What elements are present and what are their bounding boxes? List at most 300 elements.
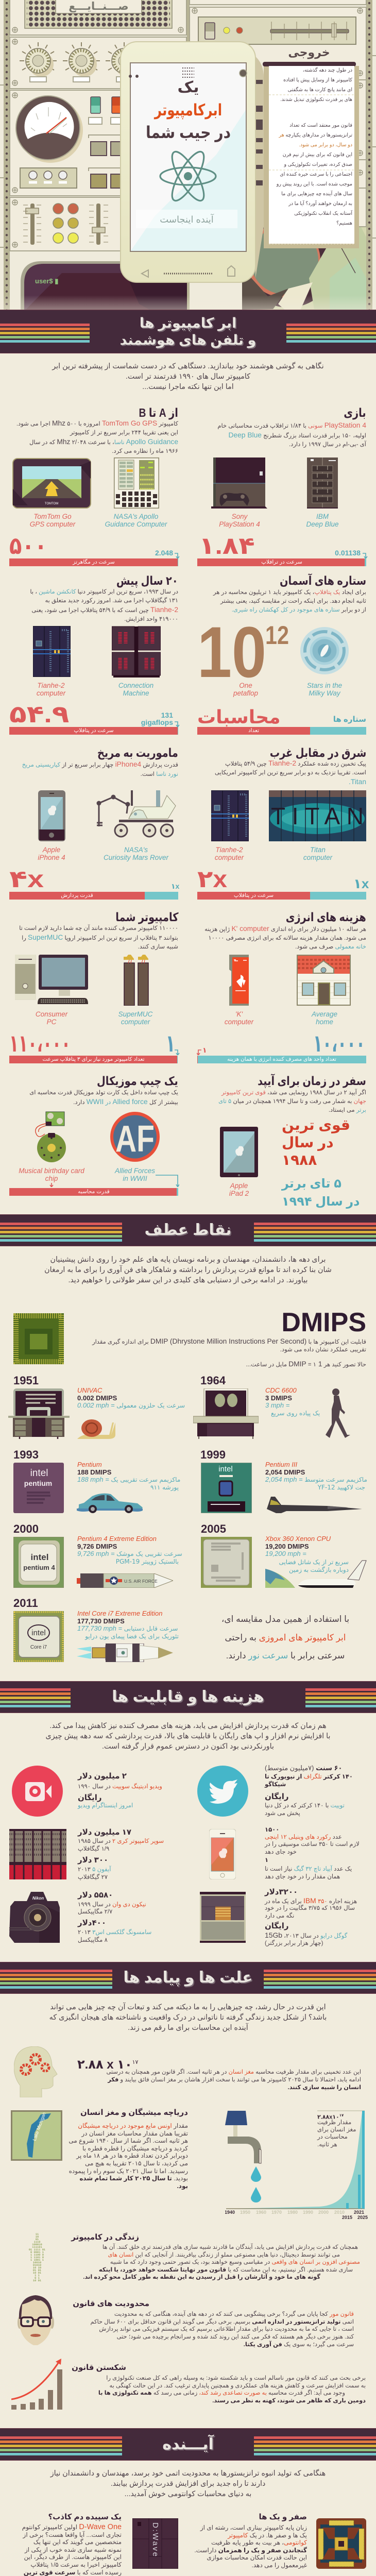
- text: life: همچنان که قدرت پردازش افزایش می یابد، آیندگان ما قادرند شبیه سازی های قدرتمند تری خلق کنند. آن ها: [102, 2244, 358, 2250]
- icon: Cray 2: [9, 1829, 66, 1879]
- banner: the future: آیـــنده: [162, 2436, 214, 2453]
- text: shuttle: دوباره بازگشت به زمین: [289, 1566, 349, 1573]
- text: imagine: حالا تصور کنید هر 1 DMIP = ۱ مایل در ساعت...: [246, 1360, 366, 1368]
- heading: east vs west: شرق در مقابل غرب: [269, 746, 366, 759]
- year 1951: 1951: [13, 1374, 39, 1387]
- heading: lake: دریاچه میشیگان و مغز انسان: [80, 2108, 188, 2117]
- text: vinyl: [265, 1826, 368, 1880]
- text: Xbox: Xbox 360 Xenon CPU 19,200 mph =: [265, 1535, 331, 1557]
- text: zeros and ones: زبان پایه کامپیوتر بیناری است، رشته ای از: [200, 2524, 307, 2531]
- icon: binary human figure: 1 1001 1: [30, 2259, 44, 2262]
- icon: binary human figure: 10 01: [33, 2272, 41, 2275]
- text: A to B: [16, 419, 178, 454]
- text: gaming: [217, 421, 367, 448]
- intro text: باشد؟ از شکل جدید زندگی گرفته تا ناتوانی در درک واقعیت و ناشناخته های هیجان انگیزی که: [49, 2013, 327, 2022]
- text: [218, 1089, 366, 1115]
- heading: limits of the law: محدودیت های قانون: [73, 2299, 149, 2308]
- stat: 10,000: ۱۰،۰۰۰: [313, 1030, 365, 1057]
- caption: Curiosity Mars Rover: [104, 854, 168, 861]
- caption: [303, 846, 333, 861]
- arrow: [197, 1049, 202, 1055]
- icon: brain gears head: [14, 2046, 58, 2097]
- title: phone headline: یک: [177, 79, 199, 96]
- panel: speaker grille with label: [10, 0, 186, 35]
- intro text: [0, 1721, 376, 1752]
- stat: 500: ۵۰۰: [9, 532, 47, 559]
- icon: quantum chip: [316, 2518, 366, 2569]
- text: A to B: ۱۹۶۶ ماه را نظاره می کرد.: [112, 448, 178, 454]
- heading: zeros and ones: صفر و یک ها: [259, 2513, 307, 2521]
- text: i7: 177,730 DMIPS: [77, 1617, 125, 1625]
- text block: moore law on paper: آستانه یک انقلاب تکنولوژیکی: [294, 211, 352, 216]
- caption: [99, 1167, 171, 1182]
- icon: binary human figure: 01 01: [33, 2269, 41, 2272]
- text: از دو برابر ستاره های موجود در کل کهکشان راه شیری.: [232, 607, 366, 613]
- icon: snail: [77, 1419, 115, 1439]
- caption: Machine: [123, 689, 149, 697]
- quote: light speed: [201, 1610, 370, 1665]
- axis labels: 2021: [354, 2210, 364, 2215]
- text block: moore law on paper: قانون مور معتقد است که تعداد: [289, 123, 352, 128]
- icon: Instagram video: [12, 1766, 63, 1817]
- axis labels: 1960: [256, 2210, 266, 2215]
- caption: PlayStation 4: [219, 520, 260, 528]
- text: برتر می ایستاد.: [329, 1107, 366, 1113]
- caption: petaflop: [233, 689, 258, 697]
- text: lake: تقریبا همان مقدار محاسبات مغز انسان در: [81, 2130, 188, 2137]
- icon: Curiosity rover: [97, 790, 176, 838]
- caption: computer: [121, 1018, 150, 1026]
- text block: moore law on paper: هستیم؟: [336, 221, 352, 226]
- text: cray: ۱۷ میلیون دلار: [78, 1828, 131, 1837]
- text: cray: [78, 1828, 181, 1883]
- caption: NASA's Apollo: [114, 513, 158, 520]
- stat: 4x: ۴x: [9, 866, 44, 892]
- icon: Nikon camera: [9, 1892, 60, 1943]
- year 1999: 1999: [200, 1448, 226, 1461]
- caption: [105, 513, 167, 528]
- icon: Pentium III: [201, 1463, 252, 1513]
- intro text: برای دهه ها، دانشمندان، مهندسان و برنامه نویسان پایه های علم خود را روی دانش پیشینیان: [50, 1256, 326, 1264]
- icon: PlayStation 4: [211, 457, 267, 509]
- text block: paper intro: ای مانند پانچ کارت ها به شگفتی: [288, 87, 352, 93]
- text: lake: رسیدید. اما تا سال ۲۰۲۱ یک سوم راه را پیموده: [69, 2167, 188, 2175]
- text: cray: ۲۷ گیگافلاپ: [78, 1874, 108, 1880]
- icon: desktop PC: [15, 955, 88, 1006]
- text: برای ایجاد یک پتافلاپ، یک کامپیوتر باید ۱ تریلیون محاسبه در هر: [213, 589, 366, 596]
- captions: Apple: [43, 846, 60, 854]
- text: i7: Intel Core i7 Extreme Edition 177,730 mph = سرعت قابل دستیابی: [77, 1609, 178, 1632]
- text: DMIPS explanation: تقریبی عملکرد نشان داده می شود.: [280, 1347, 366, 1353]
- text: camera: ۸ مگاپیکسل: [78, 1937, 108, 1943]
- captions: [15, 1167, 88, 1182]
- icon: CDC 6600: [193, 1388, 259, 1439]
- intro text: کامپیوتر سال های ۱۹۹۰ قدرتمند تر است.: [126, 372, 250, 381]
- caption: [203, 1182, 275, 1197]
- intro text: هم زمان که قدرت پردازش افزایش می یابد، هزینه های مصرف کننده نیز کاهش پیدا می کند.: [49, 1722, 327, 1730]
- captions: [37, 682, 66, 697]
- arrow: [363, 553, 368, 558]
- text: نورد ناسا است.: [141, 771, 178, 777]
- phone body: [121, 42, 255, 282]
- text: limits: سرعت می گیرد؛ به سوی یک فن آوری یکتا.: [244, 2342, 354, 2348]
- icon: Lake Michigan map: Lake Michigan: [31, 2112, 47, 2142]
- icon: Apollo guidance computer: [114, 457, 159, 509]
- text: chart label: محاسبات در: [317, 2133, 348, 2140]
- axis labels: 1980: [287, 2210, 298, 2215]
- text: lake: هر ثانیه است. اگر شما از سال ۱۹۴۰ شروع می: [69, 2137, 188, 2144]
- text: CDC: 3 DMIPS: [265, 1394, 292, 1402]
- text: [30, 589, 178, 622]
- growth curve: [226, 2112, 365, 2209]
- title: phone headline: [146, 79, 231, 142]
- text: است. تقریبا نزدیک به دو برابر سریع ترین ابر کامپیوتر امریکایی: [215, 770, 366, 776]
- icon: Nikon camera: Nikon: [32, 1896, 44, 1901]
- text: IBM storage: (چهار هزار برابر بزرگتر): [265, 1940, 323, 1946]
- caption: One: [239, 682, 252, 689]
- text: vinyl: ۱۵۰۰: [265, 1826, 279, 1833]
- banner: supercomputers and smartphones: ابر کامپیوتر ها: [140, 315, 236, 331]
- captions: Musical birthday card: [19, 1167, 84, 1175]
- icon: Pentium III: intel: [218, 1465, 233, 1473]
- heading: your computer: کامپیوتر شما: [115, 910, 178, 924]
- text: جهان به شمار می رفت و تا سال ۱۹۹۴ همچنان در میان ۵ تای: [218, 1098, 366, 1105]
- caption: [203, 1010, 275, 1026]
- text: cray: آیفون ۵ ۲۰۱۳: [78, 1866, 111, 1873]
- stat: 2x: ۲x: [197, 866, 227, 892]
- text: breaking: وجود می آید: اگر قدرت محاسبه به صورت تصاعدی رشد کند، زمانی می رسد که همه تکنولوژی ها با: [98, 2390, 345, 2396]
- caption: Titan: [310, 846, 326, 854]
- text: A to B: این یعنی تقریبا ۲۴۴ برابر سریع تر از کامپیوتر: [70, 430, 178, 436]
- icon: binary human figure: 1 1: [35, 2274, 40, 2277]
- icon: Porsche: [77, 1493, 143, 1513]
- text: breaking: [98, 2375, 366, 2404]
- icon: Tianhe-2 small: [211, 790, 249, 841]
- icon: binary human figure: 10010: [33, 2261, 41, 2264]
- intro text: [52, 362, 324, 391]
- text: D-Wave: کامپیوتر اخیرا به سرعت ۱/۵ پتافلاپ: [30, 2561, 122, 2568]
- text: video: رایگان: [78, 1793, 102, 1802]
- icon: iPhone white: [209, 1829, 236, 1879]
- text: camera: ۵۵۸۰ دلار: [78, 1891, 113, 1900]
- captions: section 1: [306, 513, 339, 528]
- bar: processing power: قدرت پردازش: [61, 892, 93, 899]
- icon: Core i7: Core i7: [30, 1645, 47, 1650]
- heading: life in computer: زندگی در کامپیوتر: [71, 2233, 139, 2242]
- title: phone headline: در جیب شما: [146, 123, 231, 142]
- text: A to B: Apollo Guidance ناسا، با سرعت ۲/۰۴۸ Mhz که در سال: [29, 438, 178, 446]
- text: vinyl: لازم است تا ۳۵۰ ساعت موسیقی را در: [265, 1841, 360, 1848]
- text: Pentium III: جت لاکهیید YF-12: [318, 1484, 365, 1491]
- captions: iPhone 4: [38, 854, 65, 861]
- text: zeros and ones: گنجاندن صفر و یک را همزمان داراست.: [194, 2547, 307, 2554]
- captions: [15, 1010, 88, 1026]
- text: Pentium III: 2,054 DMIPS: [265, 1468, 305, 1476]
- text: life: می توانند توسط دیجیتال، دنیا هایی مصنوعی مملو از زندگی بیافرینند. از آنجایی که این انسان های: [108, 2252, 340, 2258]
- caption: GPS computer: [30, 520, 75, 528]
- text: D-Wave: این کامپیوتر هاست. از طرف دیگر، این: [24, 2553, 122, 2561]
- icon: binary human figure: 01010: [33, 2264, 41, 2267]
- bar: computing power: قدرت محاسبه: [78, 1189, 110, 1195]
- text: vinyl: یک عدد آیپاد تاچ ۳۲ گیگ نیاز است تا: [265, 1866, 352, 1872]
- icon: Xbox Xenon: [201, 1537, 252, 1588]
- icon: binary human figure: 1 1100 0: [30, 2253, 44, 2257]
- text: brain: این عدد تخمینی برای مقدار ظرفیت محاسبه مغز انسان در هر ثانیه است. اگر قانون مور همچنان به درستی: [106, 2069, 361, 2075]
- text: Pentium 4: بالستیک ژوپیتر PGM-19: [116, 1558, 179, 1565]
- text: D-Wave: رسیده است که با سرعت قوی ترین: [24, 2569, 122, 2576]
- icon: K computer: [229, 955, 249, 1006]
- banner: turning points: نقاط عطف: [144, 1222, 232, 1239]
- bar: [197, 1056, 366, 1063]
- text: twitter: [265, 1764, 368, 1818]
- caption: Sony: [232, 513, 247, 520]
- heading: false dawn: یک سپیده دم کاذب؟: [48, 2513, 122, 2521]
- text: chart label: [317, 2112, 361, 2149]
- text: twitter: ۱۴۰ کرکتر تلگراف از نیویورک تا: [265, 1773, 353, 1780]
- text: Pentium III: Pentium III 2,054 mph = ماکزیمم سرعت متوسط: [265, 1461, 367, 1483]
- heading: Mars: ماموریت به مریخ: [97, 746, 178, 759]
- arrow: [175, 553, 179, 558]
- bar: speed MHz: [9, 558, 178, 566]
- stat: 1.84: ۱.۸۴: [199, 532, 255, 559]
- text: camera: نیکون دی وان در سال ۱۹۹۹: [78, 1901, 146, 1908]
- text: limits: اتمی تولید ترانزیستور در اندازه اتمی برسیم. برخی دیگر می گویند این قانون حداقل برای ۶۰۰ سال حاکم: [91, 2319, 354, 2325]
- text block: moore law on paper: موجب شده است. با این روند پیش رو: [277, 181, 352, 187]
- intro text: به دنیای محاسبات کوانتومی خوش آمدید...: [125, 2490, 251, 2498]
- arrow: [175, 721, 179, 727]
- bar: تعداد: [248, 727, 259, 734]
- heading: iPad time travel: سفر در زمان برای آیپد: [258, 1074, 366, 1088]
- caption: [215, 846, 244, 861]
- panel: sliders and lights: [10, 197, 186, 251]
- text: limits: کند. هنوز برخی دیگر هم هستند که فکر می کنند این روند کند شده و سرانجام برچیده می شود؛ حتی: [117, 2334, 354, 2340]
- banner: causes and consequences: [0, 1962, 376, 1994]
- text: UNIVAC: UNIVAC 0.002 mph = سرعت یک حلزون معمولی: [77, 1386, 185, 1409]
- icon: Gordon Moore face: [17, 2294, 55, 2346]
- icon: exponential bars: [11, 2359, 62, 2410]
- text: gaming: آی -بی-ام در سال ۱۹۹۷ را دارد.: [289, 442, 366, 448]
- intro text: [0, 1255, 376, 1285]
- text: IBM storage: نگه می دارد: [265, 1912, 294, 1919]
- text block: paper intro: [280, 67, 352, 103]
- text: cray: سوپر کامپیوتر کری ۲ در سال ۱۹۸۵: [78, 1838, 164, 1844]
- arrow: teal: [156, 1175, 179, 1187]
- intro text: بیاورند. در ادامه برخی از دستیابی های کلیدی در این سفر طولانی را خواهیم دید.: [68, 1276, 308, 1284]
- text: vinyl: ۱: [265, 1857, 268, 1863]
- rack rails: [0, 0, 376, 310]
- panel: VU meter and switches: [10, 90, 186, 196]
- icon: binary human figure: 1110: [34, 2241, 40, 2244]
- banner: costs and capabilities: [0, 1681, 376, 1713]
- text: بیشتر از کل Allied force در WWII دارد.: [73, 1098, 178, 1106]
- caption: Milky Way: [309, 689, 340, 697]
- icon: binary human figure: 10 10: [33, 2266, 41, 2269]
- text block: paper intro: در طول چند دهه گذشته،: [303, 67, 352, 73]
- intro text: با افزایش نرم افزار و اپ های رایگان با قابلیت های بالا، قدرت پردازشی که سه دهه پیش چیزی: [46, 1732, 330, 1740]
- captions: chip: [45, 1175, 58, 1182]
- panel: knobs: [10, 37, 186, 89]
- bar: سرعت در پتافلاپ: [74, 727, 114, 734]
- icon: walking man: [326, 1388, 350, 1439]
- text: lake: کردید و دریاچه میشیگان را قطره قطره با: [82, 2145, 188, 2152]
- text: breaking: به سمت افزایش سرعت و کاهش هزینه های عملکردی و همچنین پایداری ترغیب کند. در این حالت کهنگی به: [110, 2383, 366, 2389]
- text block: paper intro: کامپیوتر ها از وسایل پیش پا افتاده: [283, 77, 352, 83]
- icon: Twitter: [197, 1766, 248, 1817]
- text: camera: ۴۰۰دلار: [78, 1919, 106, 1927]
- text: lake: می کردید، تا سال ۲۰۱۵ تقریبا به هیچ می: [85, 2160, 188, 2167]
- icon: atom: [160, 148, 216, 205]
- text: limits: است ، تا جایی که ما به محدودیت دنیا برای مقدار اطلاعاتی برسیم که یک سیستم فیزیکی می تواند پردازش: [99, 2326, 354, 2332]
- bar: [197, 727, 366, 735]
- text: chart label: مغز انسان برای: [317, 2126, 356, 2133]
- text: twitter: توییت با ۱۴۰ کرکتر که در کل دنیا: [265, 1802, 345, 1809]
- banner: the future: [0, 2428, 376, 2461]
- icon: binary human figure: 10: [36, 2235, 39, 2239]
- text: twitter: شیکاگو: [265, 1781, 286, 1788]
- intro text: [0, 2468, 376, 2499]
- text: video: [78, 1772, 181, 1811]
- captions: section 1: Deep Blue: [306, 520, 339, 528]
- bar: speed teraflop: سرعت در ترافلاپ: [261, 559, 302, 565]
- callout: top 5 in 1994: [282, 1175, 369, 1211]
- icon: Earth and shuttle: [265, 1560, 367, 1588]
- text: shuttle: [279, 1558, 349, 1573]
- terminal prompt: user$ ▮: [35, 277, 58, 285]
- text: [213, 589, 366, 613]
- text: lake: مقدار اونس مایع موجود در دریاچه میشیگان: [78, 2122, 188, 2129]
- text: خانه معمولی صرف می شود.: [295, 944, 366, 950]
- text: brain: ادامه یابد، احتمالا تا سال ۲۰۲۵ کامپیوتر ها می توانند با سخت افزار هاشان بر مغز انسان فائق بیایند و فکر: [108, 2077, 361, 2083]
- text: IBM storage: رایگان: [265, 1922, 289, 1930]
- caption: [288, 1010, 361, 1026]
- year 2000: 2000: [13, 1522, 39, 1535]
- text: vinyl: همان مقدار را در خود جای دهد: [265, 1873, 340, 1880]
- intro text: آینده این محاسبات برای ما رقم می زند.: [128, 2024, 248, 2032]
- text block: moore law on paper: صدق کرده، تغییرات تکنولوژیکی و: [284, 162, 352, 167]
- text: Xbox: 19,200 DMIPS: [265, 1543, 309, 1550]
- text: D-Wave: D-Wave One اولین کامپیوتر کوانتوم: [22, 2523, 122, 2531]
- intro text: شان بنا کرده اند تا موانع قدرت پردازش را برداشته و شاهکار های فن آوری را برای ما به ارمغان: [44, 1266, 332, 1274]
- caption: Stars in the: [307, 682, 342, 689]
- quote: light speed: سرعتی برابر با سرعت نور دارند.: [226, 1651, 345, 1660]
- caption: [30, 513, 76, 528]
- year 2011: 2011: [13, 1597, 38, 1609]
- heading: DMIPS: DMIPS: [281, 1308, 366, 1337]
- text: Pentium 4: Pentium 4 Extreme Edition 9,726 mph = سرعت تقریبی یک موشک: [77, 1535, 182, 1557]
- text: video: ۲ میلیون دلار: [78, 1772, 127, 1781]
- text: هر ساله ۱۰ میلیون دلار برای راه اندازی K' computer ژاپن هزینه: [204, 925, 366, 933]
- caption: [99, 1010, 172, 1026]
- axis labels: 2000: [318, 2210, 329, 2215]
- text block: moore law on paper: اجتماعی را با سرعت خیره کننده ای: [280, 172, 352, 177]
- icon: D-Wave box: [132, 2518, 178, 2569]
- captions: Consumer: [36, 1010, 67, 1018]
- text block: moore law on paper: این قانون که برای بیش از نیم قرن: [283, 152, 352, 158]
- icon: TomTom GPS: [12, 458, 91, 509]
- axis labels: 1990: [303, 2210, 313, 2215]
- year 2005: 2005: [201, 1522, 226, 1535]
- water drops: [251, 2166, 261, 2202]
- heading: 20 years ago: ۲۰ سال پیش: [116, 574, 178, 587]
- caption: Guidance Computer: [105, 520, 167, 528]
- icon: YF-12 jet: [266, 1497, 362, 1513]
- icon: Pentium: pentium: [24, 1479, 52, 1487]
- caption: computer: [225, 1018, 253, 1026]
- caption: [118, 682, 153, 697]
- icon: house: [297, 955, 351, 1006]
- callout: strongest in 1988: [282, 1116, 364, 1169]
- text: ثانیه انجام دهد. برای اینکه راحت تر مقایسه کنید، یعنی بیشتر: [220, 598, 366, 604]
- text: Pentium: Pentium 188 mph = ماکزیمم سرعت تقریبی یک: [77, 1461, 180, 1483]
- axis labels: 2015: [342, 2215, 352, 2220]
- captions: Tianhe-2: [37, 682, 65, 689]
- intro text: این قدرت در حال رشد، چه چیزهایی را به ما دیکته می کند و تبعات آن چه چیز هایی می تواند: [50, 2003, 326, 2011]
- text: در سال ۱۹۹۳، سریع ترین ابر کامپیوتر دنیا کانکشن ماشین ، با: [30, 589, 178, 595]
- bar: speed petaflop: [197, 892, 366, 900]
- icon: missile: U.S. AIR FORCE: [124, 1579, 158, 1584]
- text: brain: [106, 2069, 361, 2092]
- text: Pentium: 188 DMIPS: [77, 1468, 111, 1476]
- text: ۱۳۱ گیگافلاپ اجرا می شد. امروز رکورد جدید متعلق به: [45, 598, 178, 604]
- text: camera: ۲/۷ مگاپیکسل: [78, 1908, 112, 1915]
- text: gaming: اولیه، ۱۵۰ برابر قدرت استاد بزرگ شطرنج Deep Blue: [229, 431, 366, 439]
- icon: binary human figure: 10 01: [33, 2279, 41, 2282]
- text: limits: [91, 2311, 354, 2349]
- heading: A to B: از A تا B: [139, 406, 178, 419]
- text: پیک تخمین زده شده عملکرد Tianhe-2 چین ۵۴/۹ پتافلاپ: [225, 759, 366, 767]
- icon: UNIVAC: [8, 1388, 70, 1439]
- text: Tianhe-2 چین است که با ۵۴/۹ پتافلاپ اجرا می شود، یعنی: [31, 606, 178, 614]
- text: lake: دوبرابر کردن تعداد قطره ها در هر ۱۸ ماه پر: [76, 2152, 188, 2159]
- text: cray: ۳۰۰ دلار: [78, 1856, 108, 1865]
- bar: speed teraflop: [197, 558, 366, 566]
- icon: IBM Deep Blue: [307, 457, 338, 509]
- text: IBM storage: ۳۲۰۰دلار: [265, 1888, 298, 1896]
- text: life: مصنوعی افزون بر انسان های واقعی در مقیاسی وسیع خواهند بود، یک تصور حتمی وجود دارد که ما شبیه: [110, 2259, 360, 2265]
- axis labels: 2025: [357, 2215, 368, 2220]
- text block: paper intro: های پر قدرت تکنولوژی تبدیل شدند.: [280, 97, 352, 103]
- text: D-Wave: تجاری است... آیا واقعا هست؟ برخی از: [23, 2531, 122, 2538]
- caption: in WWII: [123, 1175, 147, 1182]
- icon: iPhone 4: [38, 790, 65, 841]
- text: zeros and ones: غیرمعمول را می دهد.: [252, 2562, 307, 2569]
- chart: faucet and growth curve: [225, 2110, 376, 2223]
- panel: terminal screen: [10, 252, 187, 310]
- bar: computing power: [9, 1188, 178, 1196]
- icon: Pentium 4: [13, 1537, 64, 1588]
- caption: Tianhe-2: [215, 846, 243, 854]
- captions: [38, 846, 65, 861]
- year 1993: 1993: [13, 1448, 39, 1461]
- text: life: سازی شده هستیم. اگر نیستیم، به این معناست که یا قانون مور نهایتا شکست خواهد خورد، یا اینکه: [99, 2267, 353, 2273]
- text: limits: قانون مور کجا پایان می گیرد؟ برخی پیشگویی می کنند که در دهه های آینده، هنگامی که به محدودیت: [114, 2311, 354, 2317]
- text: chart label: هر ثانیه.: [317, 2141, 337, 2148]
- callout: strongest in 1988: ۱۹۸۸: [282, 1152, 317, 1168]
- caption: 'K': [235, 1010, 243, 1018]
- text: i7: تئوریک برای یک فضا پیمای یون درایو: [85, 1633, 179, 1640]
- caption: [104, 846, 169, 861]
- icon: galaxy: [300, 627, 349, 674]
- text: twitter: پخش می شود: [265, 1810, 300, 1817]
- heading: stars: ستاره های آسمان: [280, 574, 366, 587]
- text: یک چیپ ساده داخل یک کارت تولد موزیکال قدرت محاسبه ای: [29, 1090, 178, 1096]
- text: Pentium: پورشه ۹۱۱: [150, 1484, 179, 1491]
- label: 0.01138: 0.01138: [335, 549, 361, 557]
- icon: IBM 350: [200, 1892, 246, 1943]
- quote: light speed: با استفاده از همین مدل مقایسه ای،: [221, 1614, 349, 1624]
- banner: supercomputers and smartphones: و تلفن های هوشمند: [120, 332, 256, 348]
- stat: 54.9: ۵۴.۹: [9, 701, 69, 727]
